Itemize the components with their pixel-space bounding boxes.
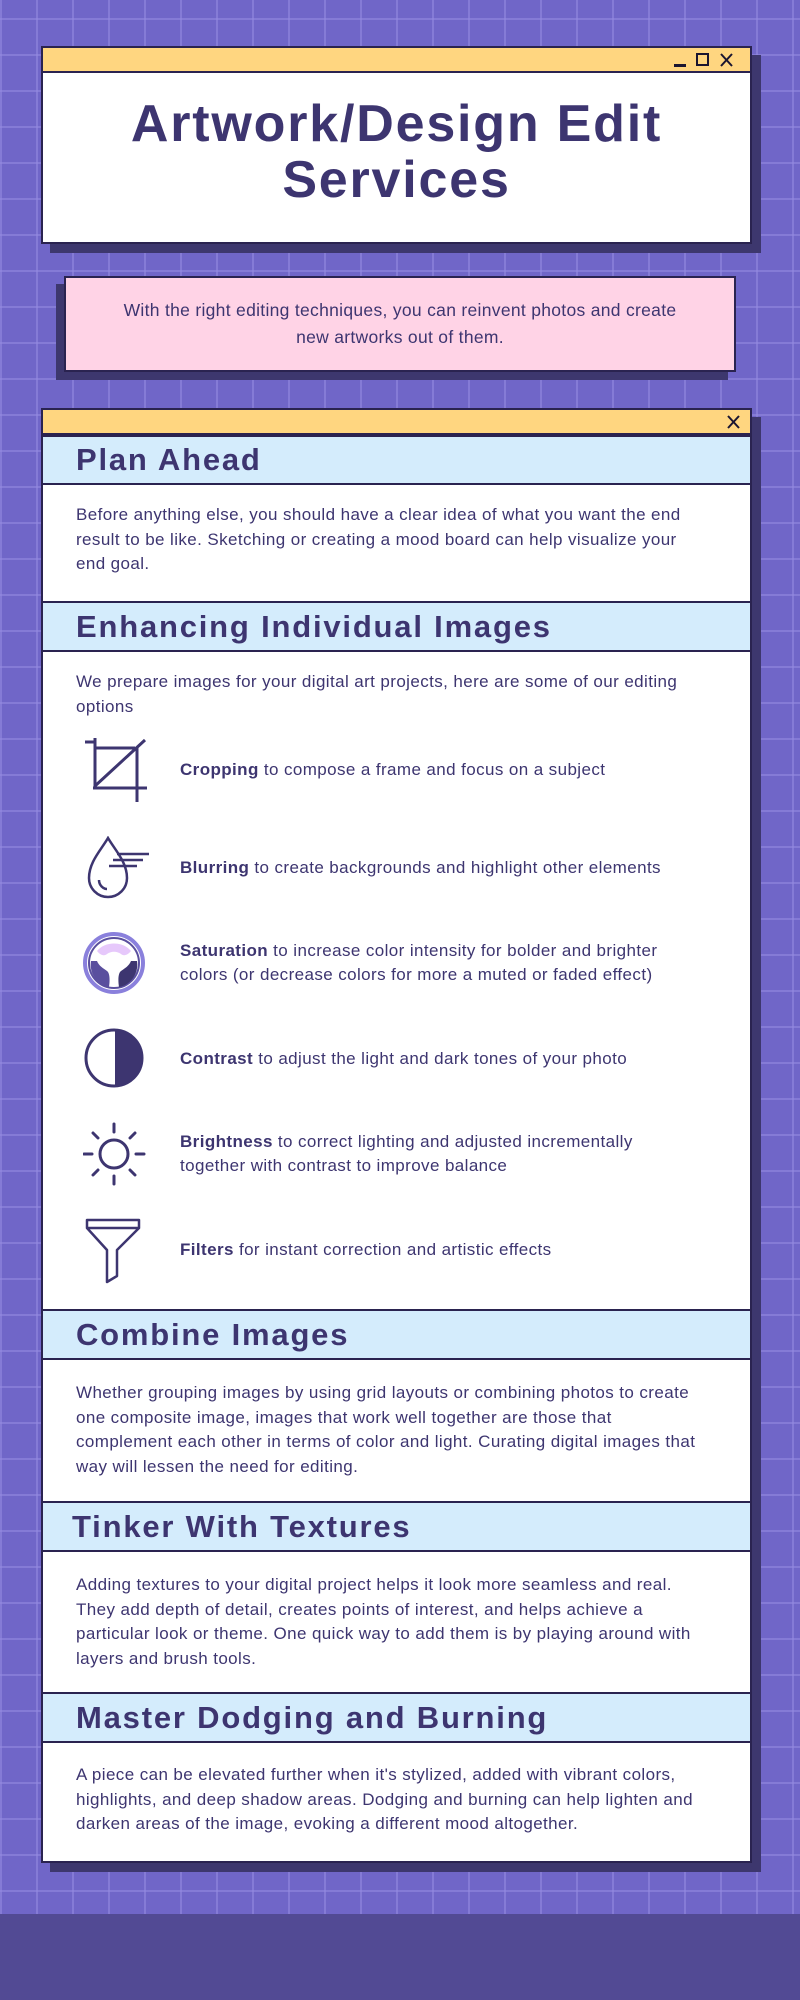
item: blurring [88,836,661,898]
item: blurring: Blurring to create backgrounds and highlight other elements [180,858,661,877]
item: cropping: Cropping to compose a frame and focus on a subject [180,760,605,779]
text: textures: particular look or theme. One quick way to add them is by playing around with [76,1624,691,1643]
heading: plan ahead [43,435,750,485]
heading: enhancing [43,601,750,652]
icon: sun [83,1122,146,1186]
text: textures: They add depth of detail, creates points of interest, and helps achieve a [76,1600,643,1618]
close icon [727,415,740,429]
text: combine: Whether grouping images by using grid layouts or combining photos to create [76,1383,689,1402]
item: contrast: Contrast to adjust the light and dark tones of your photo [180,1049,627,1068]
item: filters [86,1218,552,1284]
item: saturation: Saturation to increase color intensity for bolder and brighter [180,941,657,960]
icon: contrast [84,1028,144,1088]
item: filters: Filters for instant correction and artistic effects [180,1240,552,1259]
icon: funnel [86,1218,140,1284]
title [131,95,662,209]
title bar [43,48,750,73]
text: dodging [76,1765,693,1833]
heading: textures: Tinker With Textures [72,1508,411,1544]
title: Services [282,151,511,209]
icon: crop [85,738,147,802]
text: enhancing intro [76,672,677,716]
icon: drop [88,836,149,898]
text: plan ahead: end goal. [76,554,150,573]
main window [41,408,752,1863]
text: combine: complement each other in terms of color and light. Curating digital images that [76,1432,695,1451]
item: cropping [85,738,605,802]
text: combine: way will lessen the need for editing. [76,1456,358,1476]
text: dodging: highlights, and deep shadow areas. Dodging and burning can help lighten and [76,1790,693,1808]
window controls [674,53,733,67]
text: plan ahead: result to be like. Sketching or creating a mood board can help visualize your [76,530,677,548]
text: enhancing intro: options [76,696,134,716]
heading: enhancing: Enhancing Individual Images [76,608,552,644]
bottom band [0,1914,800,2000]
text: dodging: darken areas of the image, evoking a different mood altogether. [76,1814,578,1833]
heading: plan ahead: Plan Ahead [76,442,262,477]
heading: textures [43,1501,750,1552]
text: plan ahead [76,505,681,573]
heading: dodging [43,1692,750,1743]
text: enhancing intro: We prepare images for your digital art projects, here are some of our editing [76,672,677,691]
item: saturation: colors (or decrease colors for more a muted or faded effect) [180,965,652,984]
text: textures: layers and brush tools. [76,1648,256,1668]
item: brightness: together with contrast to improve balance [180,1156,507,1175]
intro callout [64,276,736,372]
text: textures: Adding textures to your digital project helps it look more seamless and real. [76,1575,672,1594]
text: textures [76,1575,691,1668]
text: combine: one composite image, images that work well together are those that [76,1408,612,1426]
title: Artwork/Design Edit [131,95,662,153]
heading: dodging: Master Dodging and Burning [76,1700,548,1734]
item: brightness [83,1122,633,1186]
intro callout: With the right editing techniques, you can reinvent photos and create [124,300,676,320]
text: plan ahead: Before anything else, you should have a clear idea of what you want the end [76,505,681,524]
heading: combine [43,1309,750,1360]
text: combine [76,1383,695,1476]
title bar [43,410,750,435]
title window [41,46,752,244]
item: brightness: Brightness to correct lighting and adjusted incrementally [180,1132,633,1151]
heading: combine: Combine Images [76,1316,349,1352]
icon: saturation [83,932,145,994]
item: contrast [84,1028,627,1088]
text: dodging: A piece can be elevated further when it's stylized, added with vibrant colors, [76,1765,676,1784]
intro callout: new artworks out of them. [296,327,504,347]
item: saturation [83,932,657,994]
